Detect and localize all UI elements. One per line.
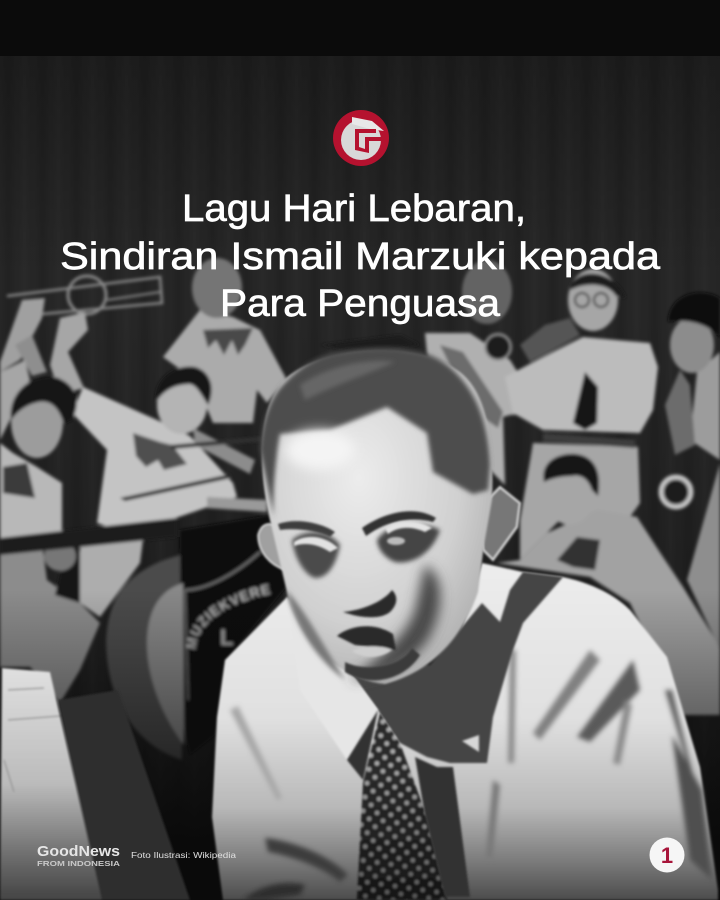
photo credit: Foto Ilustrasi: Wikipedia — [131, 851, 237, 860]
neck shadow — [340, 572, 563, 763]
musician with glasses and dark tie — [505, 269, 658, 560]
top black band — [0, 0, 720, 56]
guitar neck — [0, 518, 177, 555]
photo: band members in the background — [0, 256, 720, 760]
page number badge — [650, 838, 684, 872]
title: Lagu Hari Lebaran, — [182, 188, 526, 230]
hair highlight — [300, 361, 395, 400]
head and face — [262, 351, 492, 684]
eyes — [292, 524, 440, 578]
ears — [258, 487, 520, 570]
moustache and mouth — [337, 626, 420, 680]
seated guitarist, far left — [0, 377, 100, 703]
title: Para Penguasa — [220, 283, 501, 325]
logo: GoodNews badge — [333, 110, 389, 166]
shirt — [212, 563, 718, 900]
necktie — [347, 710, 447, 900]
eyebrows — [278, 511, 436, 537]
left collar — [287, 597, 378, 760]
standing musician with trumpet, upper centre — [320, 260, 543, 485]
footer: GoodNews from Indonesia wordmark — [37, 843, 121, 868]
footer: GoodNews from Indonesia wordmark: FROM INDONESIA — [37, 859, 121, 868]
eye highlights — [294, 521, 432, 552]
bass drum: MUZIEKVERE — [184, 581, 274, 652]
bass drum: L — [220, 625, 233, 650]
seated front musician, right — [497, 454, 720, 715]
footer: GoodNews from Indonesia wordmark: GoodNews — [37, 843, 120, 860]
musician with raised arm and drumsticks — [50, 312, 267, 617]
saxophonist, far right — [661, 292, 720, 650]
collar highlight — [462, 735, 479, 752]
photo: Ismail Marzuki portrait — [212, 348, 718, 900]
tie side shadow — [415, 757, 470, 897]
nose shadow — [343, 590, 396, 617]
trombone player arms, far left — [0, 298, 47, 440]
trombone — [7, 276, 162, 314]
title: Sindiran Ismail Marzuki kepada — [60, 236, 661, 278]
standing musician, upper centre-left — [163, 258, 287, 423]
hair — [260, 348, 490, 517]
sheet music, bottom left — [0, 668, 190, 900]
title — [60, 188, 661, 325]
page number badge: 1 — [661, 843, 673, 868]
bass drum — [104, 516, 286, 760]
face shading — [285, 430, 440, 680]
bottom fade overlay — [0, 590, 720, 900]
